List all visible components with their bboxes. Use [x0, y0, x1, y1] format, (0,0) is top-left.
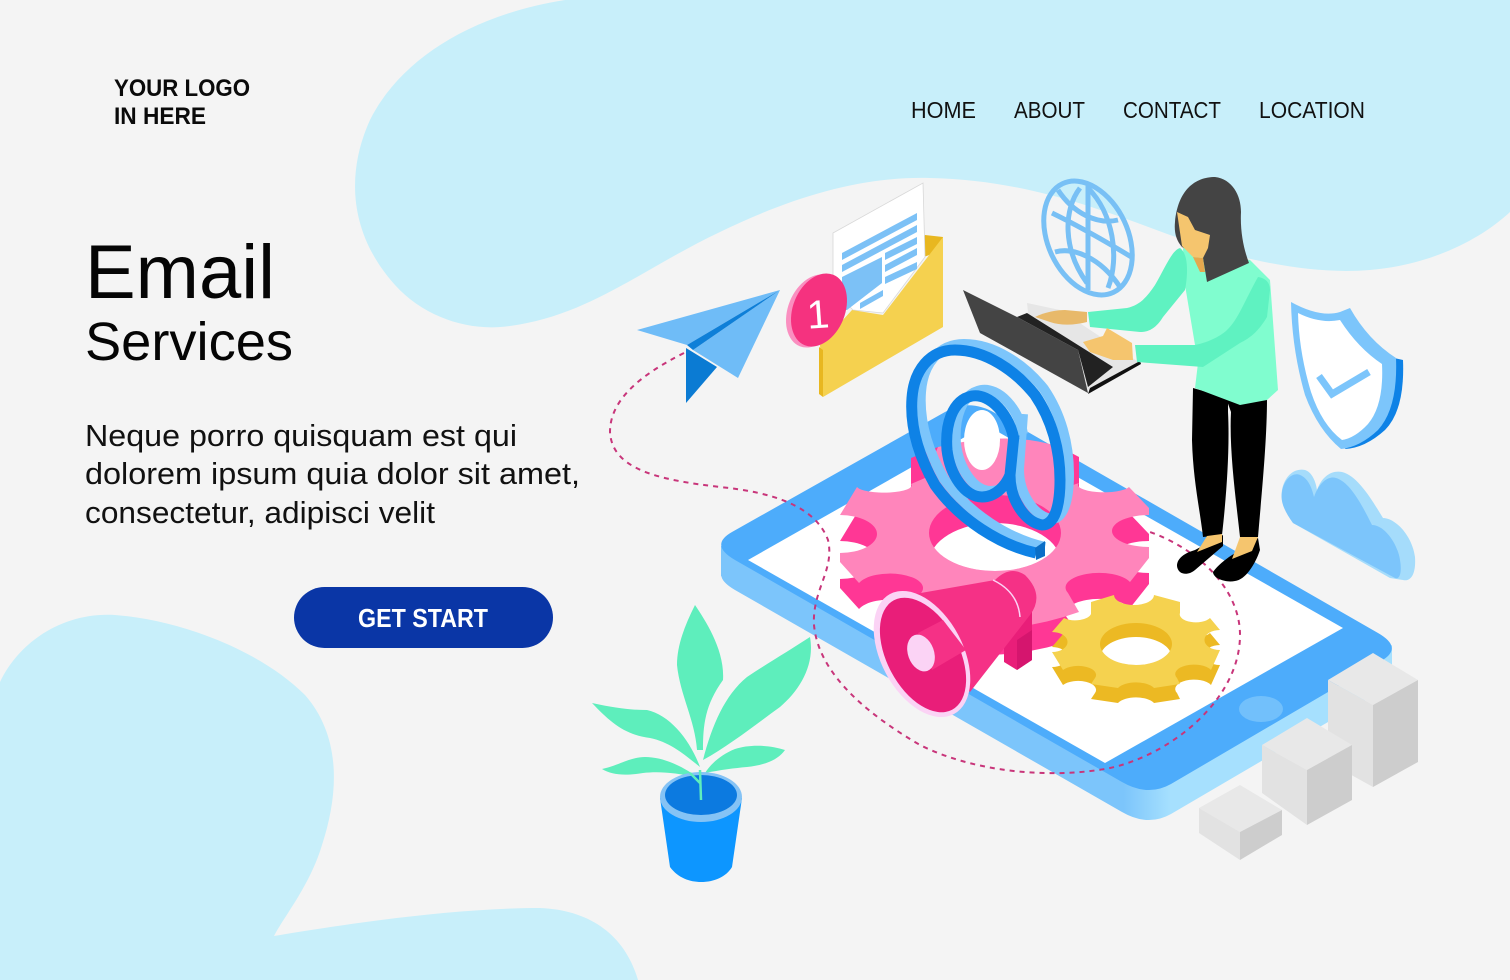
description text — [85, 418, 580, 530]
title — [85, 230, 293, 372]
navigation menu: LOCATION — [1259, 97, 1365, 123]
navigation menu: CONTACT — [1123, 97, 1221, 123]
paper plane — [637, 290, 780, 403]
pink gear — [840, 438, 1149, 655]
feet — [1177, 534, 1260, 581]
background blob: bottom left — [0, 615, 638, 980]
navigation menu: ABOUT — [1014, 97, 1085, 123]
at symbol — [912, 344, 1069, 560]
hands — [1035, 310, 1133, 360]
logo: IN HERE — [114, 103, 206, 130]
navigation menu — [911, 97, 1365, 123]
notification badge — [776, 265, 857, 356]
phone — [721, 405, 1392, 820]
yellow gear — [1052, 595, 1220, 703]
middle block — [1262, 718, 1352, 825]
logo — [114, 75, 250, 130]
shirt — [1183, 248, 1278, 405]
laptop — [963, 290, 1141, 394]
cloud — [1282, 470, 1415, 580]
button: get start: GET START — [358, 603, 488, 633]
hair — [1175, 177, 1249, 282]
back arm — [1088, 248, 1187, 332]
plant in pot — [592, 605, 811, 882]
megaphone — [854, 571, 1036, 733]
dashed flight path — [610, 353, 1240, 773]
title: Email — [85, 230, 275, 315]
security shield — [1291, 302, 1403, 449]
bar blocks — [1199, 653, 1418, 860]
description text: dolorem ipsum quia dolor sit amet, — [85, 456, 580, 491]
background blob: top right — [355, 0, 1510, 327]
description text: Neque porro quisquam est qui — [85, 418, 517, 453]
notification badge: 1 — [805, 292, 831, 338]
globe — [1026, 167, 1150, 309]
description text: consectetur, adipisci velit — [85, 495, 435, 530]
envelope with letter — [819, 183, 943, 397]
legs — [1192, 388, 1267, 537]
woman typing — [1035, 177, 1278, 581]
title: Services — [85, 312, 293, 372]
tall block — [1328, 653, 1418, 787]
small block — [1199, 785, 1282, 860]
face — [1177, 212, 1210, 258]
button: get start — [294, 587, 553, 648]
neck — [1193, 257, 1205, 272]
front arm — [1135, 277, 1270, 367]
logo: YOUR LOGO — [114, 75, 250, 102]
navigation menu: HOME — [911, 97, 976, 123]
